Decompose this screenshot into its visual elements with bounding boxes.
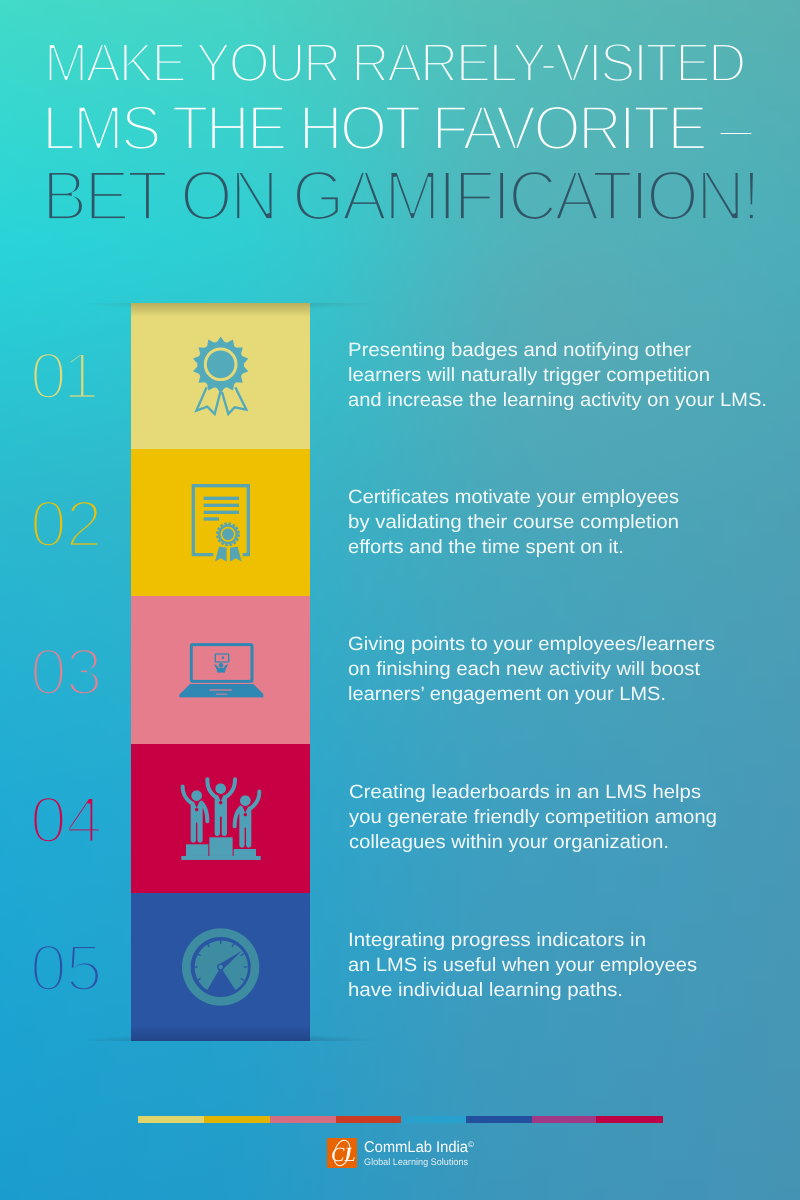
logo tagline: Global Learning Solutions bbox=[364, 1157, 468, 1168]
shadow: column top sides bbox=[80, 303, 380, 317]
icon: laptop bbox=[179, 645, 263, 697]
icon: certificate bbox=[193, 486, 248, 562]
text block 2 bbox=[348, 487, 679, 558]
panel: gold segment bbox=[131, 449, 310, 596]
logo wordmark: CommLab India bbox=[364, 1139, 468, 1156]
text block 2: efforts and the time spent on it. bbox=[348, 537, 624, 558]
panel: blue segment bbox=[131, 893, 310, 1041]
text block 5 bbox=[348, 930, 697, 1001]
shadow: top of column bbox=[131, 303, 310, 317]
text block 4: Creating leaderboards in an LMS helps bbox=[349, 782, 701, 803]
number 02: 02 bbox=[30, 487, 101, 561]
copyright mark: © bbox=[468, 1140, 474, 1149]
text block 5: an LMS is useful when your employees bbox=[348, 955, 697, 976]
number 04: 04 bbox=[30, 783, 101, 857]
text block 1 bbox=[348, 340, 767, 411]
panel: crimson segment bbox=[131, 744, 310, 893]
text block 1: and increase the learning activity on your LMS. bbox=[348, 390, 767, 411]
text block 3: on finishing each new activity will boost bbox=[348, 659, 701, 680]
title line 3: BET ON GAMIFICATION! bbox=[42, 157, 758, 236]
text block 3 bbox=[348, 634, 715, 705]
panel: pink segment bbox=[131, 596, 310, 744]
icon: badge bbox=[192, 337, 250, 414]
text block 4: colleagues within your organization. bbox=[349, 832, 669, 853]
title line 2: LMS THE HOT FAVORITE – bbox=[42, 94, 753, 164]
title line 1: MAKE YOUR RARELY-VISITED bbox=[44, 31, 745, 93]
text block 2: by validating their course completion bbox=[348, 512, 679, 533]
icon: leaderboard podium bbox=[181, 779, 261, 860]
panel: yellow segment bbox=[131, 303, 310, 449]
text block 2: Certificates motivate your employees bbox=[348, 487, 679, 508]
logo mark: CL bbox=[331, 1144, 355, 1166]
text block 1: Presenting badges and notifying other bbox=[348, 340, 692, 361]
text block 4 bbox=[349, 782, 717, 853]
center figure bbox=[207, 779, 235, 836]
logo bbox=[327, 1138, 474, 1168]
logo mark bbox=[327, 1138, 357, 1168]
numbers bbox=[30, 339, 101, 1005]
left figure bbox=[183, 787, 207, 843]
text block 1: learners will naturally trigger competition bbox=[348, 365, 710, 386]
text block 5: have individual learning paths. bbox=[348, 980, 623, 1001]
colored column bbox=[131, 303, 310, 1041]
number 01: 01 bbox=[30, 339, 97, 413]
shadow: bottom of column bbox=[131, 1026, 310, 1041]
color strip bbox=[138, 1116, 663, 1123]
text block 3: learners’ engagement on your LMS. bbox=[348, 684, 666, 705]
right figure bbox=[235, 792, 259, 848]
number 05: 05 bbox=[30, 931, 101, 1005]
title bbox=[42, 31, 758, 236]
text block 4: you generate friendly competition among bbox=[349, 807, 717, 828]
shadow: column bottom sides bbox=[80, 1026, 380, 1041]
text block 5: Integrating progress indicators in bbox=[348, 930, 646, 951]
icon: progress gauge bbox=[186, 933, 255, 1001]
number 03: 03 bbox=[30, 635, 101, 709]
text block 3: Giving points to your employees/learners bbox=[348, 634, 715, 655]
